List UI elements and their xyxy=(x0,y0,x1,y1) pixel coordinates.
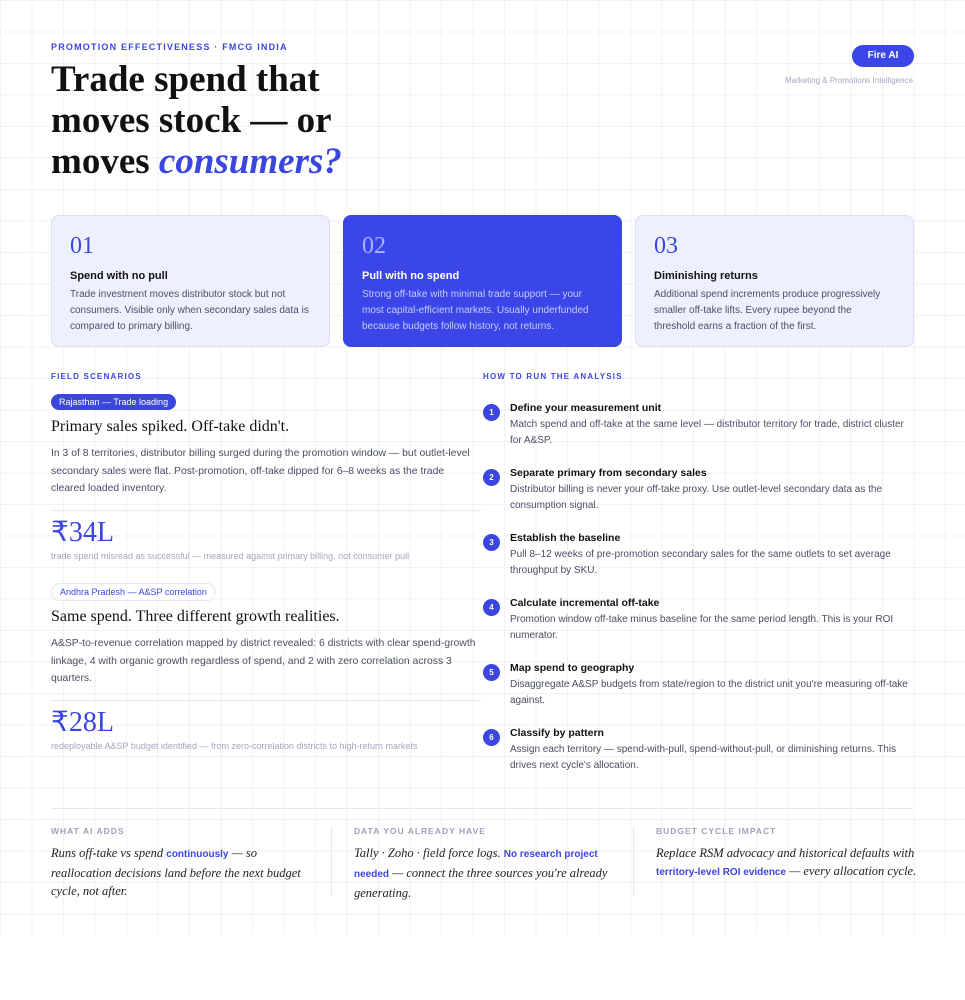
scenario 2 xyxy=(51,583,481,751)
badge: Fire AI xyxy=(852,45,914,67)
scenario 2: ₹28L xyxy=(51,706,114,738)
scenario 2: Same spend. Three different growth realities. xyxy=(51,608,340,625)
scenario 1: trade spend misread as successful — measured against primary billing, not consumer pull xyxy=(51,550,409,560)
footer: budget cycle impact: Replace RSM advocacy and historical defaults with territory-level ROI evidence — every allocation cycle. xyxy=(656,846,916,878)
footer: what AI adds: WHAT AI ADDS xyxy=(51,826,125,836)
step 3: Pull 8–12 weeks of pre-promotion secondary sales for the same outlets to set average throughput by SKU. xyxy=(510,549,891,576)
scenario 1: Primary sales spiked. Off-take didn't. xyxy=(51,418,289,435)
title: moves consumers? xyxy=(51,141,342,182)
step 4 xyxy=(483,597,893,640)
step 6: 6 xyxy=(489,733,494,742)
subtitle: brand: Marketing & Promotions Intelligence xyxy=(785,76,913,85)
card 01 xyxy=(51,215,330,347)
step 2: Separate primary from secondary sales xyxy=(510,467,707,479)
step 3: Establish the baseline xyxy=(510,532,620,544)
step 2: 2 xyxy=(489,473,494,482)
step 1: 1 xyxy=(489,408,494,417)
step 2: Distributor billing is never your off-take proxy. Use outlet-level secondary data as the consumption signal. xyxy=(510,484,882,510)
badge: Fire AI: Fire AI xyxy=(868,50,898,61)
title: moves stock — or xyxy=(51,100,332,141)
step 1 xyxy=(483,402,904,446)
card 03 xyxy=(635,215,914,347)
footer: budget cycle impact xyxy=(656,826,916,878)
card 02 xyxy=(343,215,622,347)
scenario 1: In 3 of 8 territories, distributor billing surged during the promotion window — but outlet-level secondary sales were flat. Post-promotion, off-take dipped for 6–8 weeks as the trade cleared loaded inventory. xyxy=(51,448,470,494)
step 1: Define your measurement unit xyxy=(510,402,661,414)
step 5: 5 xyxy=(489,668,494,677)
scenario 1: Rajasthan — Trade loading xyxy=(59,397,168,407)
heading: how to run: HOW TO RUN THE ANALYSIS xyxy=(483,372,623,381)
step 3: 3 xyxy=(489,538,494,547)
step 6: Assign each territory — spend-with-pull, spend-without-pull, or diminishing returns. This drives next cycle's allocation. xyxy=(510,744,896,770)
card 01: Trade investment moves distributor stock but not consumers. Visible only when secondary sales data is compared to primary billing. xyxy=(70,289,309,332)
heading: field scenarios: FIELD SCENARIOS xyxy=(51,372,142,381)
card 03: Additional spend increments produce progressively smaller off-take lifts. Every rupee beyond the threshold earns a fraction of the first. xyxy=(654,289,880,332)
card 01: 01 xyxy=(70,233,94,259)
card 03: 03 xyxy=(654,233,678,259)
footer: budget cycle impact: BUDGET CYCLE IMPACT xyxy=(656,826,776,836)
footer: data you already have: Tally · Zoho · field force logs. No research project needed — connect the three sources you're already generating. xyxy=(354,846,607,900)
scenario 1: ₹34L xyxy=(51,516,114,548)
footer: data you already have: DATA YOU ALREADY HAVE xyxy=(354,826,486,836)
step 2 xyxy=(483,467,882,510)
step 3 xyxy=(483,532,891,576)
step 6: Classify by pattern xyxy=(510,727,604,739)
footer: what AI adds: Runs off-take vs spend continuously — so reallocation decisions land before the next budget cycle, not after. xyxy=(51,846,301,898)
title xyxy=(51,59,342,182)
scenario 2: A&SP-to-revenue correlation mapped by district revealed: 6 districts with clear spend-growth linkage, 4 with organic growth regardless of spend, and 2 with zero correlation across 3 quarters. xyxy=(51,638,475,684)
card 03: Diminishing returns xyxy=(654,270,758,282)
step 6 xyxy=(483,727,896,770)
step 5: Map spend to geography xyxy=(510,662,634,674)
scenario 2: redeployable A&SP budget identified — from zero-correlation districts to high-return markets xyxy=(51,740,418,750)
card 02: Strong off-take with minimal trade support — your most capital-efficient markets. Usually underfunded because budgets follow history, not returns. xyxy=(362,289,589,332)
scenario 2: Andhra Pradesh — A&SP correlation xyxy=(60,587,207,597)
title: Trade spend that xyxy=(51,59,320,100)
card 01: Spend with no pull xyxy=(70,270,168,282)
eyebrow: PROMOTION EFFECTIVENESS · FMCG INDIA xyxy=(51,42,288,52)
step 4: Promotion window off-take minus baseline for the same period length. This is your ROI numerator. xyxy=(510,614,893,640)
step 5: Disaggregate A&SP budgets from state/region to the district unit you're measuring off-take against. xyxy=(510,679,908,706)
step 1: Match spend and off-take at the same level — distributor territory for trade, district cluster for A&SP. xyxy=(510,419,904,446)
step 5 xyxy=(483,662,908,706)
step 4: 4 xyxy=(489,603,494,612)
scenario 1 xyxy=(51,394,481,561)
step 4: Calculate incremental off-take xyxy=(510,597,659,609)
card 02: 02 xyxy=(362,233,386,259)
card 02: Pull with no spend xyxy=(362,270,459,282)
